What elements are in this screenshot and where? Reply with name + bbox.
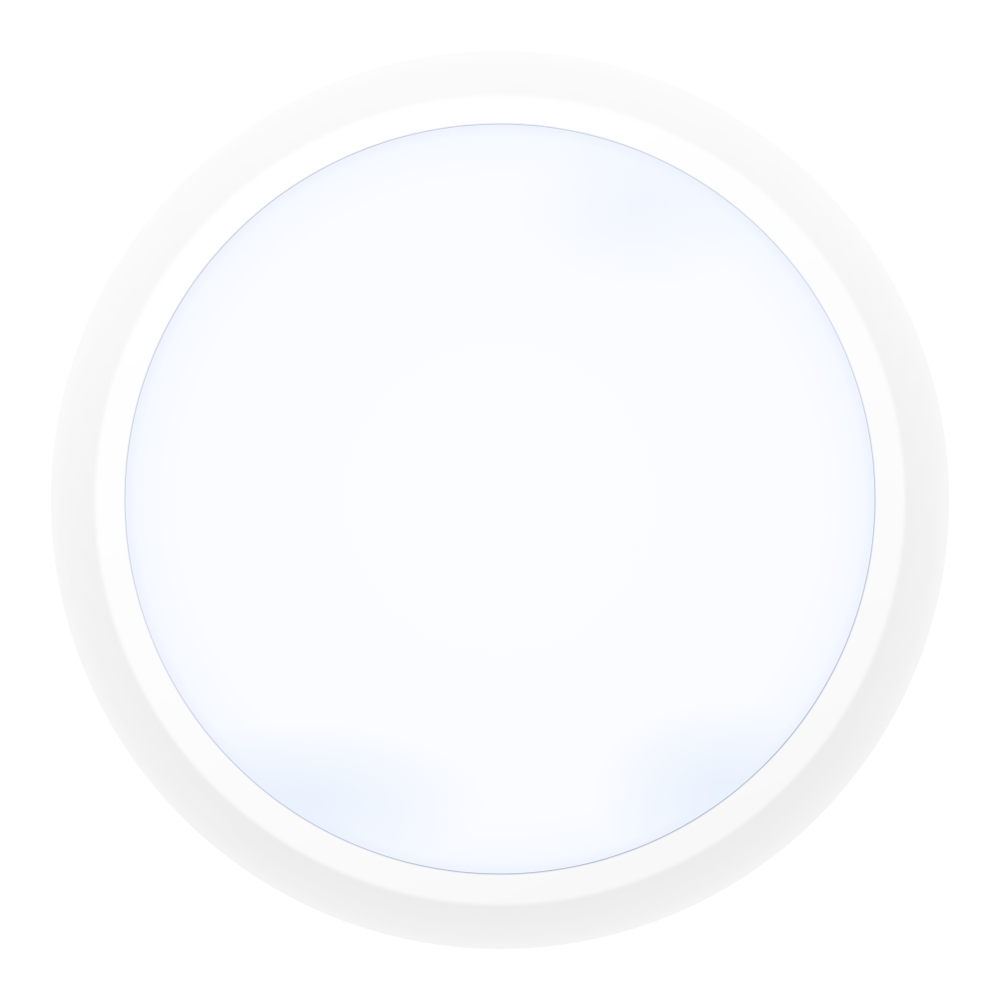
inner white rim <box>95 95 905 905</box>
round ceiling light illustration <box>57 123 948 949</box>
diffuser lens <box>110 124 876 880</box>
